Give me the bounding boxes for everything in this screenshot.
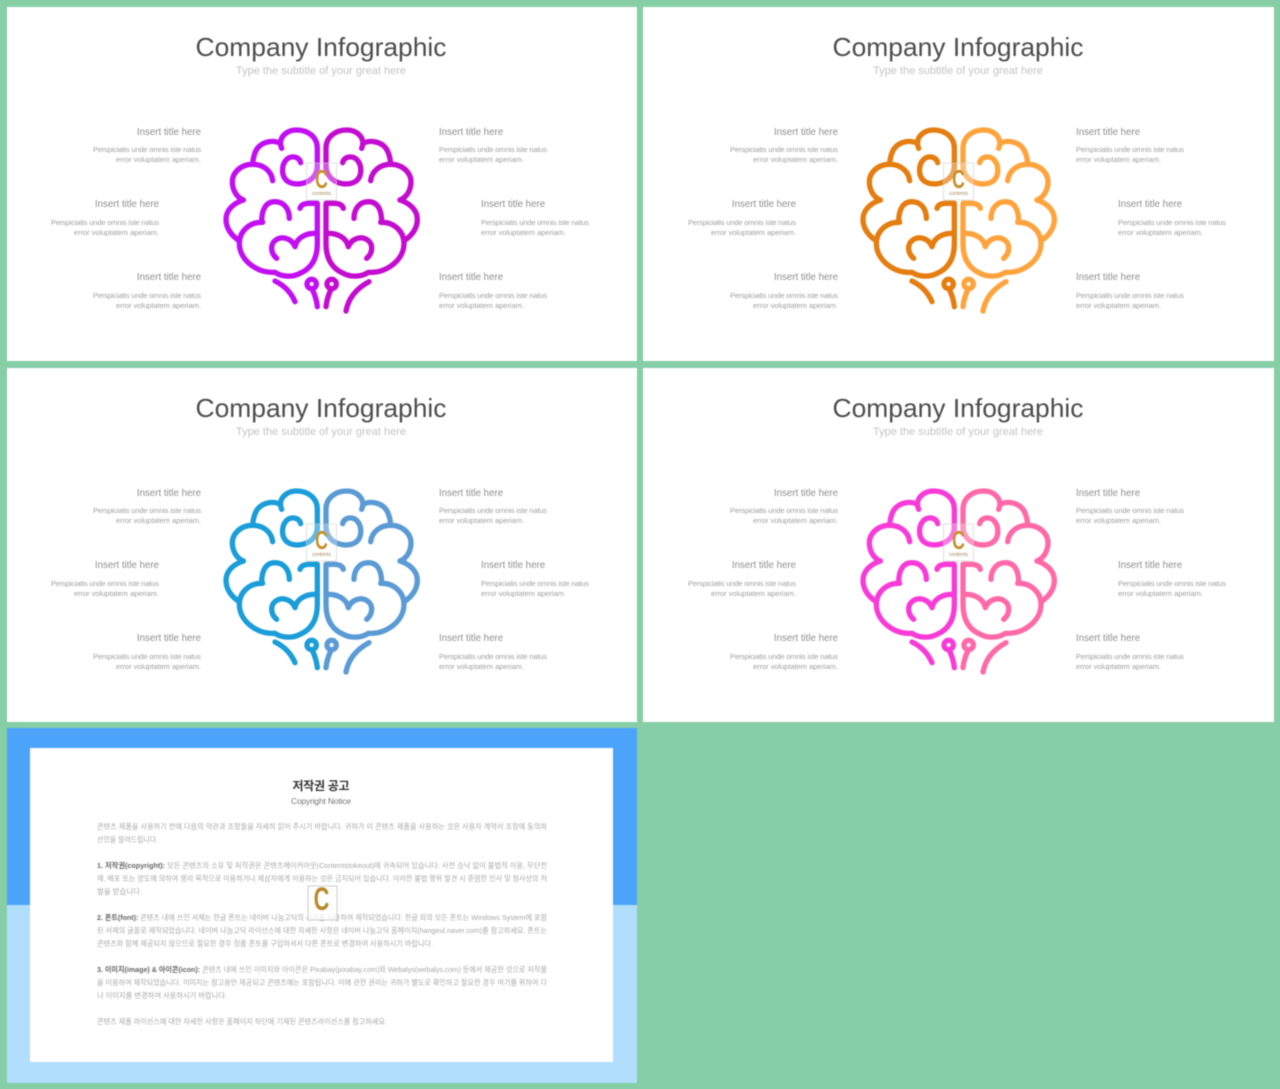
title: Company Infographic bbox=[832, 32, 1084, 62]
text block: middle right: error voluptatem aperiam. bbox=[481, 228, 566, 237]
subtitle: Type the subtitle of your great here bbox=[236, 426, 406, 438]
text block: upper right: error voluptatem aperiam. bbox=[1076, 155, 1161, 164]
watermark: contents bbox=[949, 552, 968, 558]
watermark: C bbox=[315, 526, 328, 555]
icon: pink brain bbox=[863, 491, 1054, 672]
text block: upper left bbox=[730, 488, 838, 525]
text block: upper right bbox=[1076, 488, 1184, 525]
text block: middle left: error voluptatem aperiam. bbox=[74, 228, 159, 237]
icon: blue brain bbox=[226, 491, 417, 672]
text block: lower right: error voluptatem aperiam. bbox=[439, 662, 524, 671]
watermark: C bbox=[314, 881, 330, 917]
notice intro: 콘텐츠 제품을 사용하기 전에 다음의 약관과 조항들을 자세히 읽어 주시기 바랍니다. 귀하가 이 콘텐츠 제품을 사용하는 것은 사용자 계약서 조항에 동의하 bbox=[97, 821, 547, 831]
text block: middle left: Perspiciatis unde omnis iste natus bbox=[51, 579, 159, 588]
text block: middle right: Insert title here bbox=[1118, 199, 1182, 210]
watermark: contents bbox=[312, 552, 331, 558]
text block: middle right: error voluptatem aperiam. bbox=[1118, 589, 1203, 598]
text block: upper left: error voluptatem aperiam. bbox=[753, 155, 838, 164]
text block: middle right: Insert title here bbox=[481, 199, 545, 210]
text block: upper right: Insert title here bbox=[439, 488, 503, 499]
text block: upper right: Perspiciatis unde omnis iste natus bbox=[1076, 506, 1184, 515]
panel: purple brain slide bbox=[7, 7, 637, 361]
text block: lower left: Perspiciatis unde omnis iste natus bbox=[93, 291, 201, 300]
text block: upper left: Perspiciatis unde omnis iste natus bbox=[93, 145, 201, 154]
text block: upper left bbox=[93, 488, 201, 525]
watermark: C bbox=[952, 526, 965, 555]
text block: middle right: Insert title here bbox=[1118, 560, 1182, 571]
text block: lower right: Insert title here bbox=[1076, 633, 1140, 644]
text block: middle left bbox=[688, 560, 796, 598]
text block: middle left: Insert title here bbox=[95, 199, 159, 210]
watermark: C bbox=[315, 165, 328, 194]
text block: lower left: error voluptatem aperiam. bbox=[753, 662, 838, 671]
text block: middle left: Insert title here bbox=[732, 560, 796, 571]
text block: lower right: Perspiciatis unde omnis iste natus bbox=[439, 291, 547, 300]
notice section 3: 나 이미지를 변경하여 사용하시기 바랍니다. bbox=[97, 990, 227, 1000]
text block: upper right bbox=[1076, 127, 1184, 164]
text block: lower right: Perspiciatis unde omnis iste natus bbox=[439, 652, 547, 661]
panel: blue brain slide bbox=[7, 368, 637, 722]
text block: middle left: Insert title here bbox=[95, 560, 159, 571]
text block: lower right bbox=[1076, 272, 1184, 310]
text block: upper left: error voluptatem aperiam. bbox=[116, 155, 201, 164]
text block: lower left: error voluptatem aperiam. bbox=[116, 301, 201, 310]
text block: middle right bbox=[481, 560, 589, 598]
text block: middle left: Perspiciatis unde omnis iste natus bbox=[688, 579, 796, 588]
text block: upper right bbox=[439, 127, 547, 164]
text block: lower right: Perspiciatis unde omnis iste natus bbox=[1076, 291, 1184, 300]
text block: middle left: error voluptatem aperiam. bbox=[711, 589, 796, 598]
panel: pink brain slide bbox=[643, 368, 1274, 722]
text block: middle left: Perspiciatis unde omnis iste natus bbox=[688, 218, 796, 227]
text block: lower right: Insert title here bbox=[1076, 272, 1140, 283]
text block: lower left bbox=[93, 633, 201, 671]
text block: middle right bbox=[1118, 560, 1226, 598]
notice section 2: 2. 폰트(font): 콘텐츠 내에 쓰인 서체는 한글 폰트는 네이버 나눔고딕의 서체를 사용하여 제작되었습니다. 한글 외의 모든 폰트는 Windows System에 포함 bbox=[97, 912, 547, 922]
text block: middle left: error voluptatem aperiam. bbox=[711, 228, 796, 237]
text block: upper right: Insert title here bbox=[439, 127, 503, 138]
text block: middle left: Insert title here bbox=[732, 199, 796, 210]
text block: middle right bbox=[1118, 199, 1226, 237]
text block: middle left bbox=[688, 199, 796, 237]
text block: upper left: error voluptatem aperiam. bbox=[116, 516, 201, 525]
notice section 3: 을 이용하여 제작되었습니다. 이미지는 참고용만 제공되고 콘텐츠에는 포함됩니다. 이에 관한 권리는 귀하가 별도로 확인하고 필요한 경우 여기를 위하여 다 bbox=[97, 977, 547, 987]
text block: middle right bbox=[481, 199, 589, 237]
text block: middle right: Perspiciatis unde omnis iste natus bbox=[481, 579, 589, 588]
text block: lower right: error voluptatem aperiam. bbox=[1076, 662, 1161, 671]
notice section 2 bbox=[97, 912, 547, 948]
watermark: contents bbox=[312, 191, 331, 197]
text block: upper right: Perspiciatis unde omnis iste natus bbox=[439, 145, 547, 154]
text block: middle left bbox=[51, 199, 159, 237]
text block: upper left: Insert title here bbox=[774, 488, 838, 499]
text block: lower left: error voluptatem aperiam. bbox=[116, 662, 201, 671]
text block: lower left: Insert title here bbox=[774, 272, 838, 283]
text block: upper left: Insert title here bbox=[137, 488, 201, 499]
text block: middle left: Perspiciatis unde omnis iste natus bbox=[51, 218, 159, 227]
text block: lower right bbox=[1076, 633, 1184, 671]
watermark bbox=[306, 524, 336, 561]
text block: upper right: error voluptatem aperiam. bbox=[1076, 516, 1161, 525]
notice intro: 선언을 알려드립니다. bbox=[97, 834, 158, 844]
text block: lower right bbox=[439, 633, 547, 671]
notice closing line: 콘텐츠 제품 라이선스에 대한 자세한 사항은 홈페이지 하단에 기재된 콘텐츠라이선스를 참고하세요. bbox=[97, 1016, 387, 1026]
text block: lower left bbox=[93, 272, 201, 310]
notice section 2: 된 서체의 글꼴로 제작되었습니다. 네이버 나눔고딕 라이선스에 대한 자세한 사항은 네이버 나눔고딕 홈페이지(hangeul.naver.com)를 참고하세요. 폰트는 bbox=[97, 925, 547, 935]
text block: upper left: Insert title here bbox=[137, 127, 201, 138]
text block: middle right: Insert title here bbox=[481, 560, 545, 571]
watermark bbox=[308, 881, 337, 920]
notice section 1: 재, 배포 또는 양도에 의하여 영리 목적으로 이용하거나 제삼자에게 이용하는 것은 금지되어 있습니다. 이러한 불법 행위 발견 시 준엄한 민사 및 형사상의 처 bbox=[97, 873, 547, 883]
notice subheading: Copyright Notice bbox=[291, 796, 351, 806]
title: Company Infographic bbox=[196, 393, 446, 423]
text block: middle left: error voluptatem aperiam. bbox=[74, 589, 159, 598]
text block: upper left: Perspiciatis unde omnis iste natus bbox=[93, 506, 201, 515]
text block: upper right: Insert title here bbox=[1076, 127, 1140, 138]
text block: lower left bbox=[730, 272, 838, 310]
title: Company Infographic bbox=[832, 393, 1084, 423]
text block: lower right: Perspiciatis unde omnis iste natus bbox=[1076, 652, 1184, 661]
text block: lower left: Insert title here bbox=[774, 633, 838, 644]
text block: upper right: Perspiciatis unde omnis iste natus bbox=[439, 506, 547, 515]
notice section 1: 벌을 받습니다. bbox=[97, 886, 142, 896]
text block: middle right: error voluptatem aperiam. bbox=[1118, 228, 1203, 237]
title: Company Infographic bbox=[196, 32, 446, 62]
text block: lower left: error voluptatem aperiam. bbox=[753, 301, 838, 310]
subtitle: Type the subtitle of your great here bbox=[873, 65, 1043, 77]
text block: upper left bbox=[93, 127, 201, 164]
text block: upper left: error voluptatem aperiam. bbox=[753, 516, 838, 525]
text block: middle right: error voluptatem aperiam. bbox=[481, 589, 566, 598]
text block: upper right: Perspiciatis unde omnis iste natus bbox=[1076, 145, 1184, 154]
text block: upper left bbox=[730, 127, 838, 164]
watermark: contents bbox=[949, 191, 968, 197]
text block: lower right: Insert title here bbox=[439, 633, 503, 644]
notice heading: 저작권 공고 bbox=[292, 778, 350, 793]
text block: upper right: error voluptatem aperiam. bbox=[439, 155, 524, 164]
text block: upper left: Insert title here bbox=[774, 127, 838, 138]
panel: copyright notice bbox=[7, 728, 637, 1083]
icon: purple brain bbox=[226, 130, 417, 311]
subtitle: Type the subtitle of your great here bbox=[873, 426, 1043, 438]
text block: lower left bbox=[730, 633, 838, 671]
watermark bbox=[306, 163, 336, 200]
panel: orange brain slide bbox=[643, 7, 1274, 361]
watermark bbox=[944, 163, 974, 200]
notice section 1 bbox=[97, 860, 547, 896]
text block: middle right: Perspiciatis unde omnis iste natus bbox=[1118, 579, 1226, 588]
text block: lower left: Perspiciatis unde omnis iste natus bbox=[730, 291, 838, 300]
text block: upper right: error voluptatem aperiam. bbox=[439, 516, 524, 525]
notice section 3: 3. 이미지(image) & 아이콘(icon): 콘텐츠 내에 쓰인 이미지와 아이콘은 Pixabay(pixabay.com)와 Webalys(webalys.com) 등에서 제공한 것으로 저작물 bbox=[97, 964, 547, 974]
notice section 3 bbox=[97, 964, 547, 1000]
text block: lower right: error voluptatem aperiam. bbox=[1076, 301, 1161, 310]
subtitle: Type the subtitle of your great here bbox=[236, 65, 406, 77]
text block: lower left: Perspiciatis unde omnis iste natus bbox=[93, 652, 201, 661]
text block: lower right: error voluptatem aperiam. bbox=[439, 301, 524, 310]
text block: upper right bbox=[439, 488, 547, 525]
text block: upper left: Perspiciatis unde omnis iste natus bbox=[730, 506, 838, 515]
notice section 2: 콘텐츠와 함께 제공되지 않으므로 필요한 경우 정품 폰트를 구입하셔서 다른 폰트로 변경하여 사용하시기 바랍니다. bbox=[97, 938, 433, 948]
text block: middle right: Perspiciatis unde omnis iste natus bbox=[481, 218, 589, 227]
text block: lower left: Insert title here bbox=[137, 633, 201, 644]
text block: lower right bbox=[439, 272, 547, 310]
text block: lower left: Insert title here bbox=[137, 272, 201, 283]
watermark: C bbox=[952, 165, 965, 194]
text block: middle right: Perspiciatis unde omnis iste natus bbox=[1118, 218, 1226, 227]
text block: middle left bbox=[51, 560, 159, 598]
text block: upper right: Insert title here bbox=[1076, 488, 1140, 499]
icon: orange brain bbox=[863, 130, 1054, 311]
watermark bbox=[944, 524, 974, 561]
text block: upper left: Perspiciatis unde omnis iste natus bbox=[730, 145, 838, 154]
notice section 1: 1. 저작권(copyright): 모든 콘텐츠의 소유 및 저작권은 콘텐츠메이커아웃(Contentstokeout)에 귀속되어 있습니다. 사전 승낙 없이 불법적 이용, 무단전 bbox=[97, 860, 547, 870]
notice intro bbox=[97, 821, 547, 844]
text block: lower left: Perspiciatis unde omnis iste natus bbox=[730, 652, 838, 661]
text block: lower right: Insert title here bbox=[439, 272, 503, 283]
